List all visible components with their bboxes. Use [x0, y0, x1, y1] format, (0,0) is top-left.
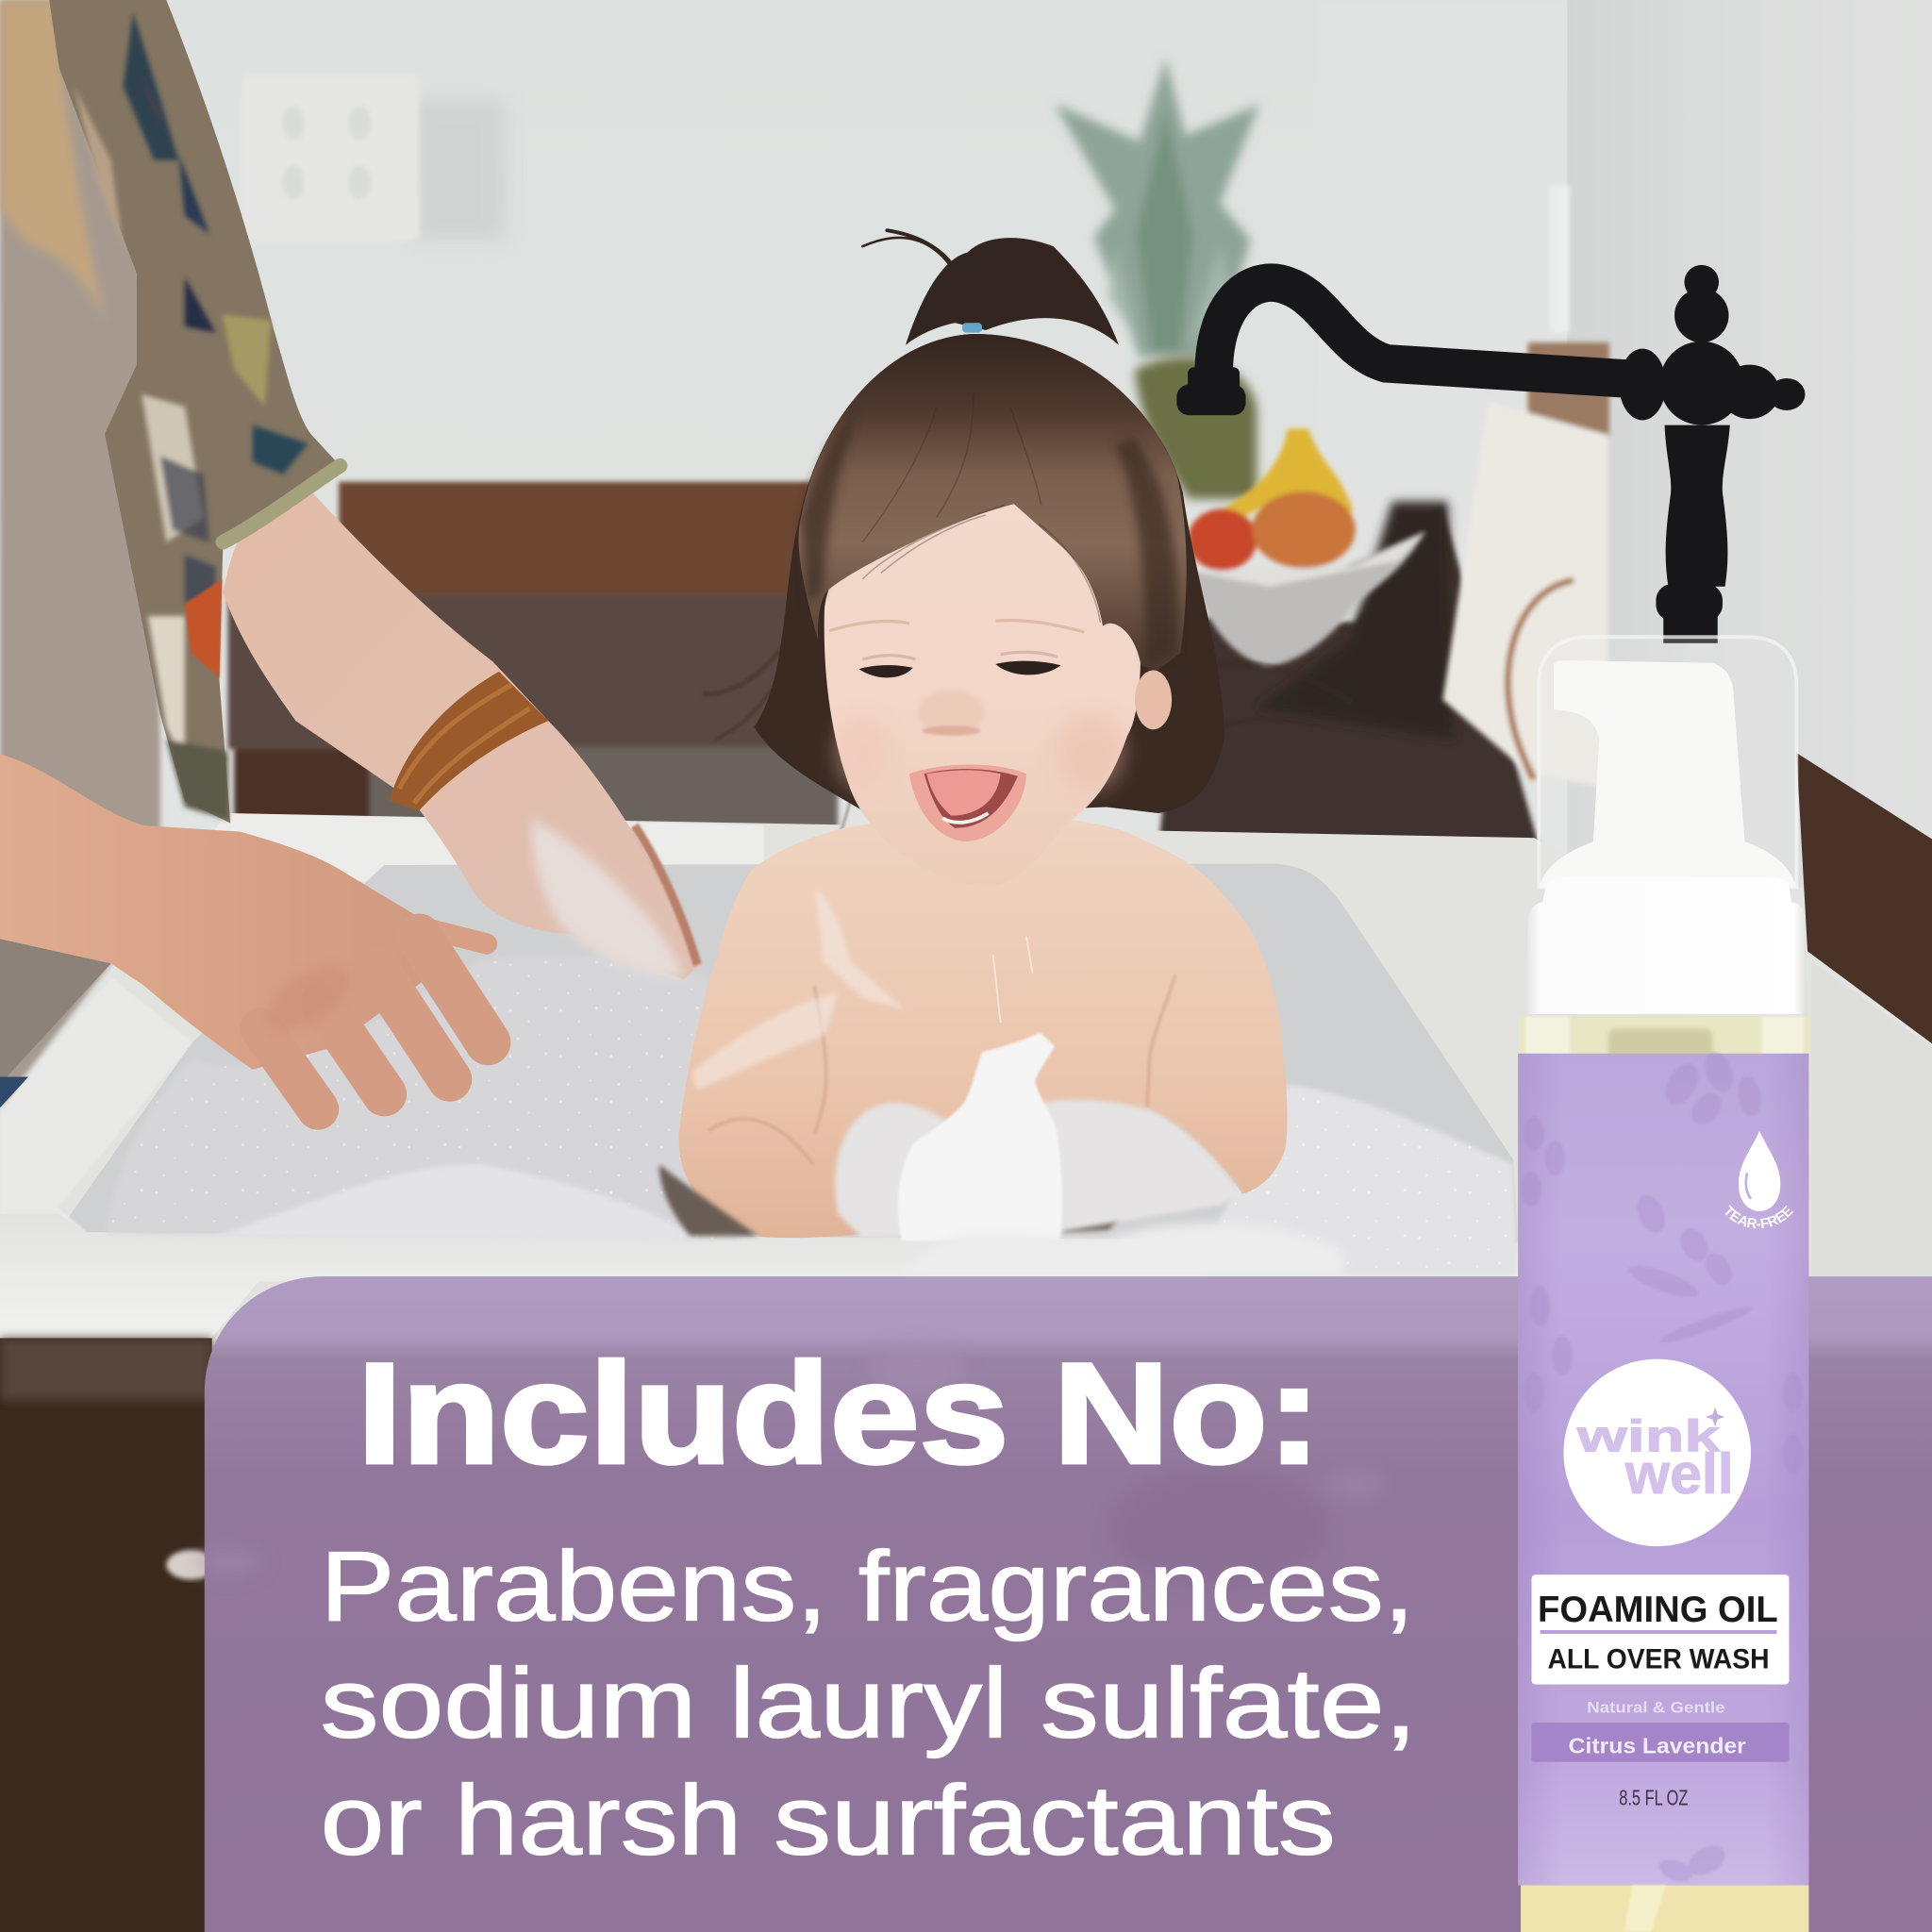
sink front rim: [0, 1214, 1522, 1341]
product name box: FOAMING OIL: [1538, 1590, 1778, 1630]
scent bar: Citrus Lavender: [1569, 1734, 1746, 1758]
bowl: [1194, 531, 1425, 667]
natural and gentle tagline: Natural & Gentle: [1587, 1699, 1725, 1717]
product bottle: [1518, 635, 1810, 1932]
nose: [918, 690, 985, 734]
fingers: [261, 937, 488, 1109]
dark water gaps in foam: [659, 1152, 1132, 1236]
cutting board: [1442, 185, 1609, 789]
near arm and hand: [0, 754, 488, 1109]
wood backsplash band and counter: [228, 482, 1541, 850]
eyes: [858, 665, 913, 677]
volume: 8.5 FL OZ: [1619, 1785, 1688, 1809]
mouth: [909, 764, 1026, 841]
hair top with bangs: [799, 334, 1187, 672]
hair: [0, 0, 105, 321]
back hair: [754, 334, 1224, 816]
wood edge on the right: [1796, 753, 1932, 1043]
darker hair at the sides: [801, 413, 1178, 665]
panel body text: sodium lauryl sulfate,: [321, 1649, 1417, 1759]
panel body text: Parabens, fragrances,: [321, 1532, 1414, 1642]
bottle top with oil: [1519, 1017, 1810, 1058]
clear dome cap: [1539, 637, 1796, 887]
bracelet: [390, 672, 548, 810]
loose hair strands: [702, 616, 1352, 899]
scent bar: [1532, 1723, 1789, 1762]
tear-free badge: [1724, 1131, 1794, 1228]
arm and torso creases: [708, 974, 1175, 1164]
wall outlet: [242, 74, 506, 241]
translucent purple panel: [193, 1276, 1932, 1932]
oil at bottom: [1521, 1885, 1808, 1932]
white collar: [1525, 877, 1807, 1014]
body and shoulders: [679, 816, 1288, 1238]
foam around baby and foam bottle shape: [835, 1033, 1343, 1276]
product name box: [1532, 1574, 1789, 1684]
ponytail: [862, 230, 1119, 345]
dark wood lower left: [0, 1338, 216, 1932]
panel body text: [321, 1532, 1417, 1876]
thumb: [419, 926, 487, 943]
sink basin: [58, 864, 1518, 1242]
face: [824, 503, 1141, 887]
soap on chest: [692, 890, 906, 1091]
left rim: [0, 977, 192, 1281]
baby: [679, 230, 1352, 1238]
label leaf decorations: [1522, 1048, 1803, 1886]
eyebrows: [829, 621, 1084, 632]
far arm and hand: [223, 475, 700, 979]
cheek blush: [1056, 712, 1124, 791]
wink well logo: wink: [1575, 1411, 1722, 1461]
wink well logo: [1563, 1359, 1751, 1546]
tear-free badge: TEAR-FREE: [1724, 1205, 1794, 1228]
pump head: [1539, 660, 1796, 887]
white counter and sink: [0, 813, 1932, 1343]
ear: [1135, 671, 1172, 729]
product name box: ALL OVER WASH: [1547, 1643, 1770, 1674]
pineapple and fruit bowl: [1055, 58, 1425, 667]
panel body text: or harsh surfactants: [321, 1766, 1336, 1876]
panel heading: Includes No:: [358, 1334, 1321, 1493]
shirt: [0, 0, 160, 1108]
woman: shirt, hair, scarf and arms: [0, 0, 700, 1109]
bath foam: [106, 887, 1518, 1275]
faucet: [1176, 265, 1805, 643]
wink well logo: well: [1624, 1442, 1734, 1506]
scarf: [49, 0, 340, 823]
label: [1518, 1054, 1808, 1885]
